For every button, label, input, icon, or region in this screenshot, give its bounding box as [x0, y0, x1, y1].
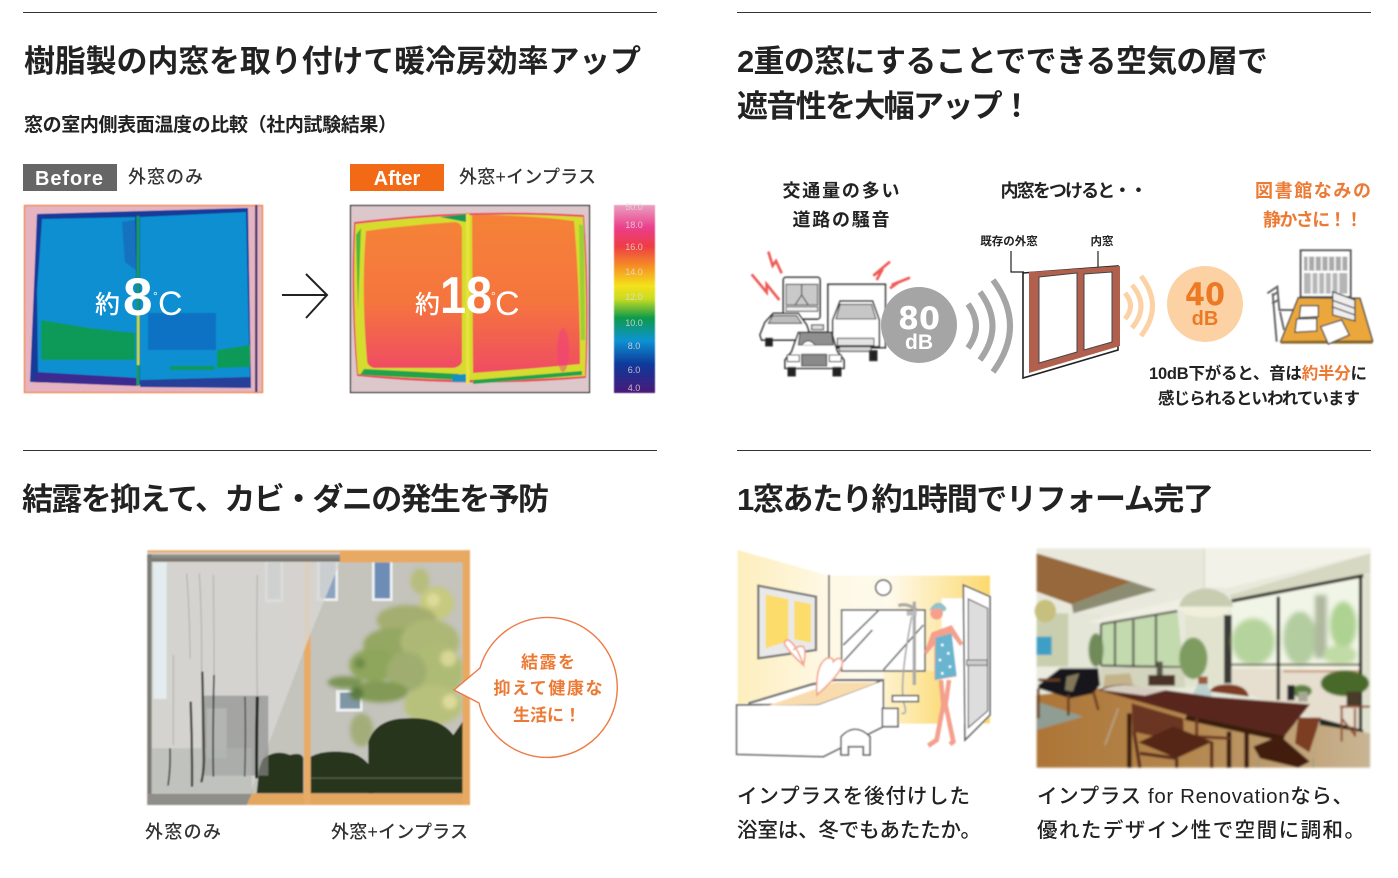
caption: living room: インプラス for Renovationなら、	[1037, 785, 1353, 808]
badge: 80 dB: dB	[905, 331, 933, 354]
temperature text: before: 8	[123, 268, 152, 327]
badge: 40 dB: dB	[1192, 308, 1218, 330]
caption: living room: 優れたデザイン性で空間に調和。	[1037, 818, 1365, 842]
subheading: temperature comparison: 窓の室内側表面温度の比較（社内試験結果）	[24, 114, 397, 136]
badge: 40 dB	[1167, 266, 1243, 342]
arrow	[282, 274, 327, 318]
photo caption: outer only: 外窓のみ	[145, 822, 221, 842]
illustration: traffic	[752, 252, 910, 376]
caption: bathroom: インプラスを後付けした	[737, 785, 970, 808]
label: road noise	[782, 180, 900, 230]
temperature text: before: C	[158, 285, 183, 323]
frost overlay: outer window only	[147, 552, 340, 805]
photo: living room	[1035, 548, 1371, 768]
label: library quiet: 図書館なみの	[1255, 180, 1371, 201]
thermal image: after	[350, 206, 590, 392]
panel: condensation	[22, 450, 657, 842]
badge: 80 dB	[881, 287, 957, 363]
panel: quick renovation	[737, 450, 1371, 842]
illustration: bathroom	[737, 550, 990, 757]
heading: sound insulation: 遮音性を大幅アップ！	[737, 89, 1032, 124]
label: with inner window: 内窓をつけると・・	[1000, 181, 1148, 201]
illustration: library desk	[1267, 250, 1373, 344]
before label: Before	[35, 168, 103, 190]
speech bubble: 結露を	[521, 653, 575, 672]
after label	[350, 164, 596, 191]
temperature text: after: °	[491, 289, 496, 303]
temperature text: after	[415, 267, 520, 325]
note: 10 dB	[1149, 363, 1367, 408]
temperature text: after: 約	[415, 291, 440, 319]
temperature colour scale: 50.0	[625, 202, 643, 212]
heading: condensation: 結露を抑えて、カビ・ダニの発生を予防	[22, 482, 549, 517]
label: road noise: 交通量の多い	[782, 180, 900, 201]
badge: 80 dB: 80	[898, 301, 940, 337]
temperature colour scale: 12.0	[625, 292, 643, 302]
temperature colour scale: 4.0	[628, 383, 640, 393]
heading: sound insulation: 2重の窓にすることでできる空気の層で	[737, 44, 1268, 79]
thermal image: before	[24, 205, 262, 392]
illustration: double window: 既存の外窓	[980, 234, 1038, 248]
before label	[23, 164, 203, 191]
heading: quick renovation: 1窓あたり約1時間でリフォーム完了	[737, 482, 1214, 517]
bushes	[257, 718, 463, 793]
note: 10 dB: 感じられるといわれています	[1158, 388, 1360, 408]
temperature colour scale: 14.0	[625, 267, 643, 277]
illustration: double window: 内窓	[1090, 234, 1114, 248]
temperature text: after: C	[495, 285, 520, 323]
speech bubble: 抑えて健康な	[494, 679, 602, 698]
badge: 40 dB: 40	[1185, 277, 1225, 313]
photo: window comparison	[145, 550, 470, 842]
heading: sound insulation	[737, 44, 1268, 124]
temperature text: before	[95, 268, 183, 327]
tree	[328, 568, 463, 747]
illustration: double window	[980, 234, 1120, 378]
temperature colour scale: 6.0	[628, 365, 640, 375]
temperature colour scale: 10.0	[625, 318, 643, 328]
sound waves: quiet	[1125, 276, 1152, 336]
photo caption: with inplus: 外窓+インプラス	[331, 822, 468, 842]
heading: heating efficiency: 樹脂製の内窓を取り付けて暖冷房効率アップ	[24, 44, 641, 79]
before label: 外窓のみ	[128, 167, 203, 187]
temperature colour scale: 18.0	[625, 220, 643, 230]
window frame	[151, 794, 470, 805]
after label: After	[374, 168, 421, 190]
note: 10 dB: 10dB下がると、音は約半分に	[1149, 363, 1367, 383]
caption: living room	[1037, 785, 1365, 842]
temperature text: after: 18	[440, 267, 492, 325]
caption: bathroom: 浴室は、冬でもあたたか。	[737, 819, 981, 842]
label: library quiet	[1255, 180, 1371, 230]
temperature colour scale: 16.0	[625, 242, 643, 252]
temperature text: before: °	[153, 289, 158, 303]
speech bubble	[454, 617, 617, 757]
temperature colour scale	[614, 202, 655, 393]
panel: heating and cooling efficiency	[23, 12, 657, 393]
temperature colour scale: 8.0	[628, 341, 640, 351]
caption: bathroom	[737, 785, 981, 842]
sound waves: loud	[968, 280, 1010, 372]
label: road noise: 道路の騒音	[792, 210, 890, 230]
label: library quiet: 静かさに！！	[1263, 210, 1363, 230]
temperature text: before: 約	[95, 291, 120, 319]
panel: sound insulation	[737, 12, 1373, 408]
speech bubble: 生活に！	[513, 706, 581, 725]
after label: 外窓+インプラス	[459, 167, 596, 187]
